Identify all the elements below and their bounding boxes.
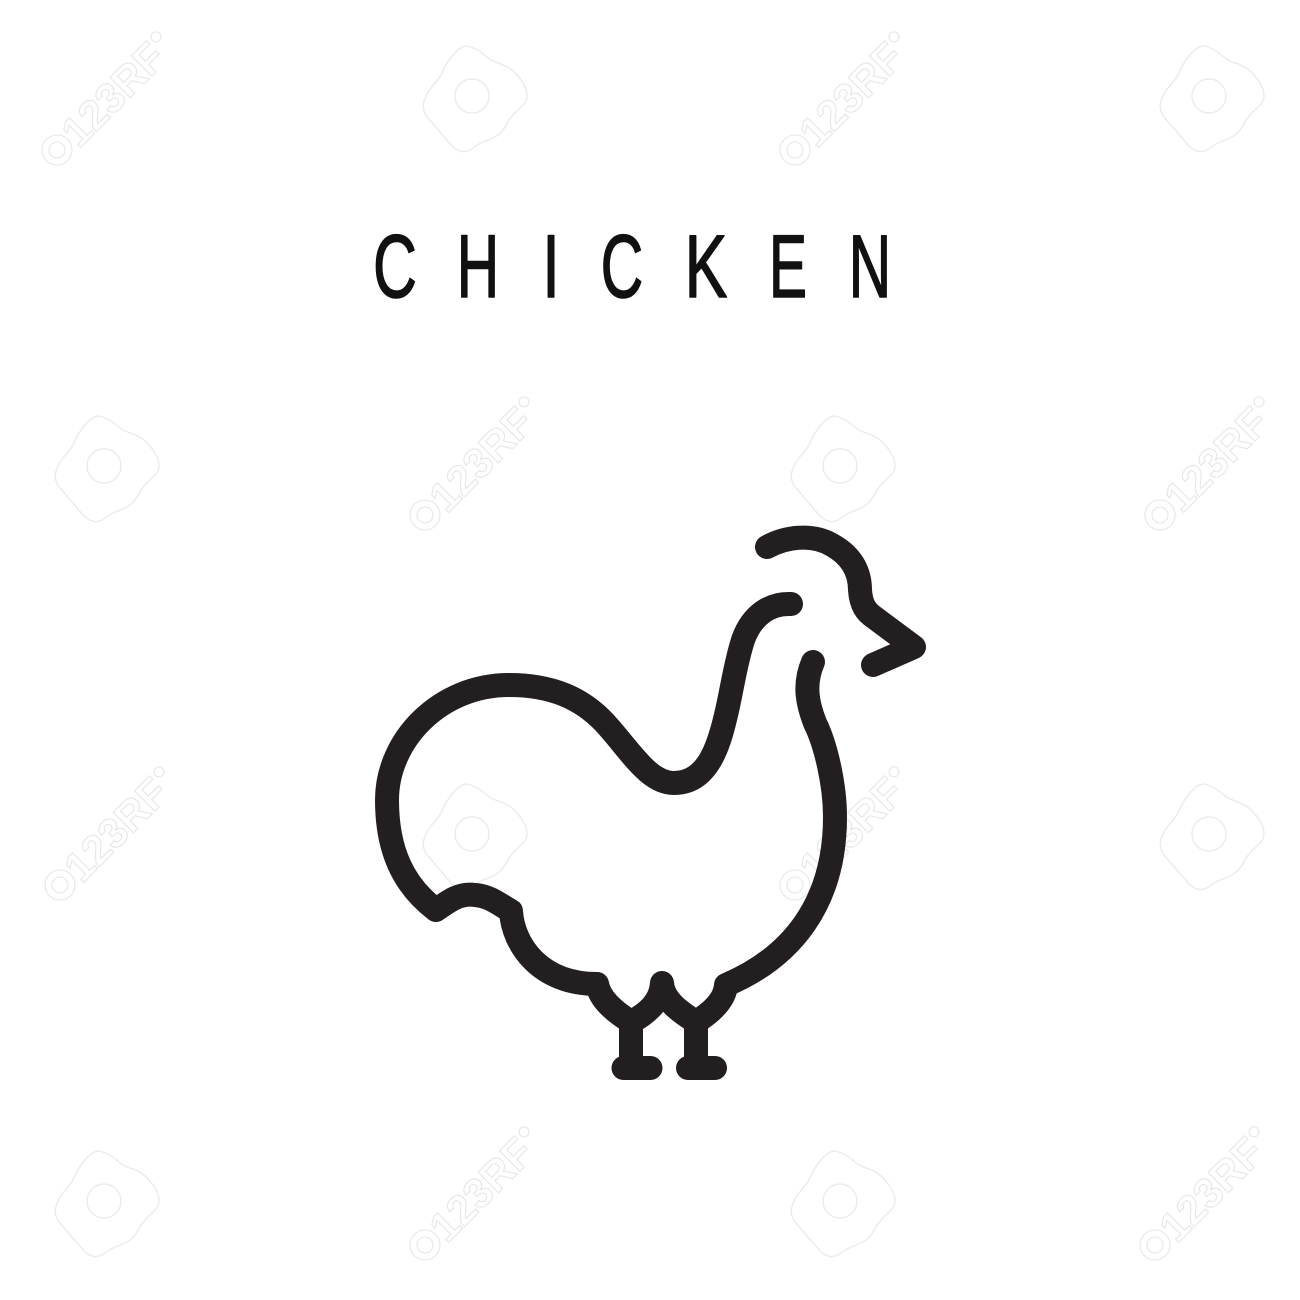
neck, back and tail <box>387 604 791 984</box>
title: C <box>373 217 417 317</box>
watermark: 123RF logos: 123RF <box>790 768 912 891</box>
right leg <box>688 1022 715 1068</box>
watermark: 123RF logos: 123RF <box>790 33 912 156</box>
title: E <box>769 216 807 316</box>
watermark: 123RF logos: 123RF <box>55 768 177 891</box>
watermark: 123RF logos: 123RF <box>1150 1128 1272 1251</box>
watermark: 123RF logos: 123RF <box>1155 398 1277 521</box>
watermark: 123RF logos: 123RF <box>52 33 174 156</box>
title: C <box>601 217 643 316</box>
icon: chicken <box>387 538 914 1068</box>
left leg <box>624 1022 650 1068</box>
watermark: 123RF logos: 123RF <box>420 398 542 521</box>
title: N <box>849 217 891 316</box>
watermark: 123RF logos: 123RF <box>420 1128 542 1251</box>
title: K <box>685 218 727 317</box>
comb and beak <box>767 538 914 665</box>
title: I <box>542 217 560 317</box>
title <box>373 216 891 317</box>
legs junction and belly <box>597 662 835 1022</box>
title: H <box>457 217 499 316</box>
